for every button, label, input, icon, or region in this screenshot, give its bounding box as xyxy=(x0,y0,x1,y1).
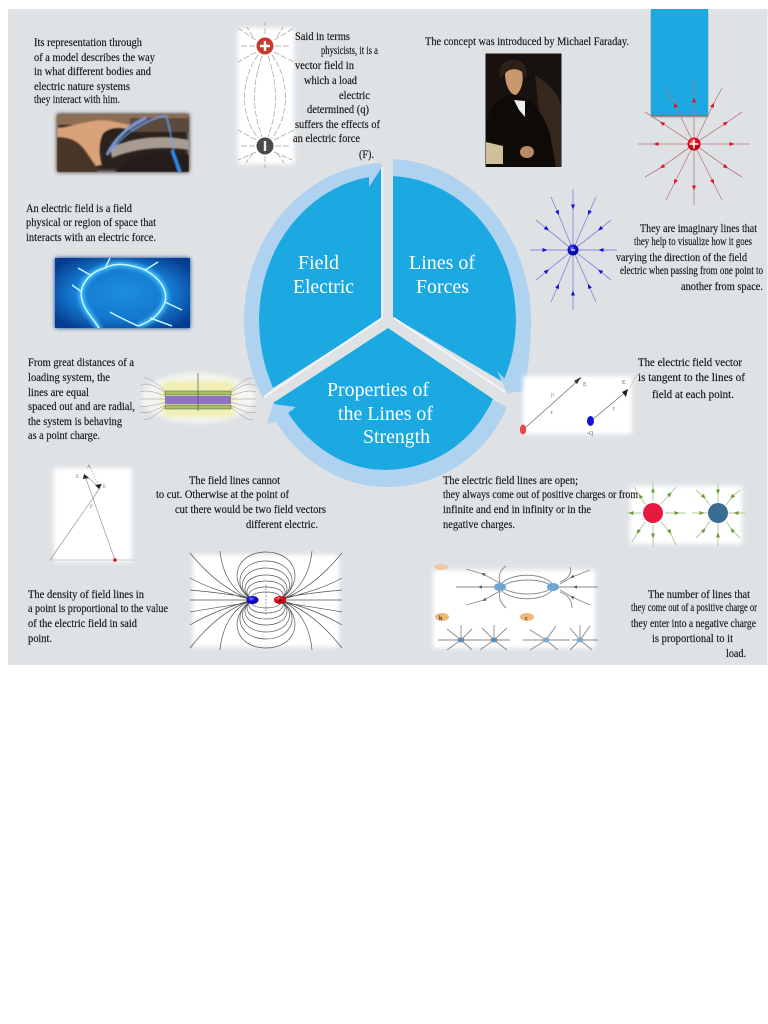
text: electric field definition xyxy=(26,203,157,244)
cycle diagram xyxy=(244,159,531,487)
text: lines are open: they always come out of positive charges or from xyxy=(443,489,638,501)
text: density of field lines: of the electric field in said xyxy=(28,618,137,630)
diagram: positive charge radial field xyxy=(638,80,750,205)
text: field lines cannot cut: to cut. Otherwise at the point of xyxy=(156,489,289,501)
diagram: intersecting vectors triangle xyxy=(50,465,135,562)
text: number of lines proportional: is proportional to it xyxy=(652,633,734,645)
text: model representation xyxy=(34,37,155,106)
text: great distances: the system is behaving xyxy=(28,416,122,428)
diagram: positive and negative spheres with green vectors xyxy=(627,482,745,547)
text: lines are open: negative charges. xyxy=(443,519,515,531)
heading: field electric: Field xyxy=(298,252,339,274)
text: number of lines proportional: load. xyxy=(726,648,746,660)
diagram: negative charge radial field xyxy=(530,189,617,310)
diagram: field vector at point charges: p xyxy=(551,392,554,398)
heading: field electric xyxy=(293,252,354,298)
diagram: field vector at point charges: E xyxy=(583,382,587,388)
image: blue plasma lightning xyxy=(55,258,190,330)
decorative blue rectangle xyxy=(651,9,708,117)
text: density of field lines: point. xyxy=(28,633,52,645)
text: field lines cannot cut: different electric. xyxy=(246,519,318,531)
heading: lines of forces: Forces xyxy=(416,276,469,298)
text: number of lines proportional xyxy=(631,589,757,660)
text: lines are open: The electric field lines are open; xyxy=(443,475,578,487)
text: field lines cannot cut: cut there would be two field vectors xyxy=(175,504,326,516)
text: physics definition xyxy=(293,31,380,161)
diagram: field line count panels a, b, c: b xyxy=(439,616,443,622)
diagram: parallel plates field xyxy=(140,373,256,423)
text: physics definition: an electric force xyxy=(293,133,360,145)
text: physics definition: suffers the effects of xyxy=(295,119,380,131)
heading: field electric: Electric xyxy=(293,276,354,298)
white divider lines xyxy=(264,167,505,397)
text: great distances: lines are equal xyxy=(28,387,89,399)
text: great distances: as a point charge. xyxy=(28,430,100,442)
heading: lines of forces: Lines of xyxy=(409,252,475,274)
heading: lines of forces xyxy=(409,252,475,298)
text: model representation: in what different bodies and xyxy=(34,66,151,78)
text: number of lines proportional: The number of lines that xyxy=(648,589,751,601)
text: imaginary lines xyxy=(616,223,763,293)
text: density of field lines xyxy=(28,589,168,645)
diagram: electric dipole field lines xyxy=(190,551,342,650)
heading: properties of the lines of strength xyxy=(327,379,433,448)
text: model representation: they interact with him. xyxy=(34,94,120,106)
text: electric field vector tangent: The electric field vector xyxy=(638,357,742,369)
text: physics definition: (F). xyxy=(359,149,374,161)
heading: properties of the lines of strength: the Lines of xyxy=(338,403,433,425)
heading: properties of the lines of strength: Strength xyxy=(363,426,430,448)
arrow band: top left xyxy=(244,163,382,398)
text: density of field lines: a point is proportional to the value xyxy=(28,603,168,615)
segment: lines of forces xyxy=(393,176,516,382)
text: physics definition: which a load xyxy=(304,75,357,87)
text: faraday: The concept was introduced by Michael Faraday. xyxy=(425,36,629,48)
diagram: intersecting vectors triangle: E xyxy=(103,485,106,490)
text: physics definition: vector field in xyxy=(295,60,354,72)
text: imaginary lines: varying the direction of the field xyxy=(616,252,747,264)
arrow band: right xyxy=(393,159,531,393)
text: field lines cannot cut xyxy=(156,475,326,531)
diagram: field vector at point charges: r xyxy=(613,406,615,412)
text: lines are open: infinite and end in infinity or in the xyxy=(443,504,591,516)
text: model representation: of a model describes the way xyxy=(34,52,155,64)
diagram: field line count panels a, b, c xyxy=(433,564,598,650)
text: physics definition: physicists, it is a xyxy=(321,45,378,57)
text: great distances xyxy=(28,357,135,442)
text: electric field vector tangent xyxy=(638,357,745,401)
segment: properties of the lines of strength xyxy=(273,328,493,470)
text: electric field definition: interacts with an electric force. xyxy=(26,232,156,244)
text: lines are open xyxy=(443,475,638,531)
text: physics definition: determined (q) xyxy=(307,104,369,116)
text: great distances: From great distances of a xyxy=(28,357,134,369)
diagram: intersecting vectors triangle: P xyxy=(90,505,93,510)
diagram: intersecting vectors triangle: E xyxy=(76,475,79,480)
diagram: field line count panels a, b, c: c xyxy=(525,616,528,622)
image: portrait of michael faraday xyxy=(486,54,562,167)
segment: field electric xyxy=(259,168,382,388)
text: physics definition: electric xyxy=(339,90,370,102)
text: model representation: electric nature systems xyxy=(34,81,130,93)
text: great distances: loading system, the xyxy=(28,372,110,384)
diagram: positive and negative charge field xyxy=(238,22,294,168)
text: density of field lines: The density of field lines in xyxy=(28,589,144,601)
diagram: field vector at point charges: E xyxy=(622,380,626,386)
heading: properties of the lines of strength: Properties of xyxy=(327,379,429,401)
text: electric field definition: physical or region of space that xyxy=(26,217,157,229)
diagram: field vector at point charges: -Q xyxy=(587,431,594,437)
diagram: intersecting vectors triangle: A xyxy=(87,465,91,470)
diagram: field vector at point charges xyxy=(520,374,637,437)
diagram: field vector at point charges: r xyxy=(551,410,553,416)
arrow band: bottom xyxy=(267,400,507,487)
text: electric field vector tangent: field at each point. xyxy=(652,389,734,401)
text: great distances: spaced out and are radial, xyxy=(28,401,135,413)
image: hand and electric arcs xyxy=(57,114,189,172)
text: field lines cannot cut: The field lines cannot xyxy=(189,475,281,487)
text: electric field vector tangent: is tangent to the lines of xyxy=(638,372,745,384)
text: physics definition: Said in terms xyxy=(295,31,350,43)
text: model representation: Its representation through xyxy=(34,37,142,49)
text: electric field definition: An electric field is a field xyxy=(26,203,132,215)
background panel xyxy=(8,9,768,665)
